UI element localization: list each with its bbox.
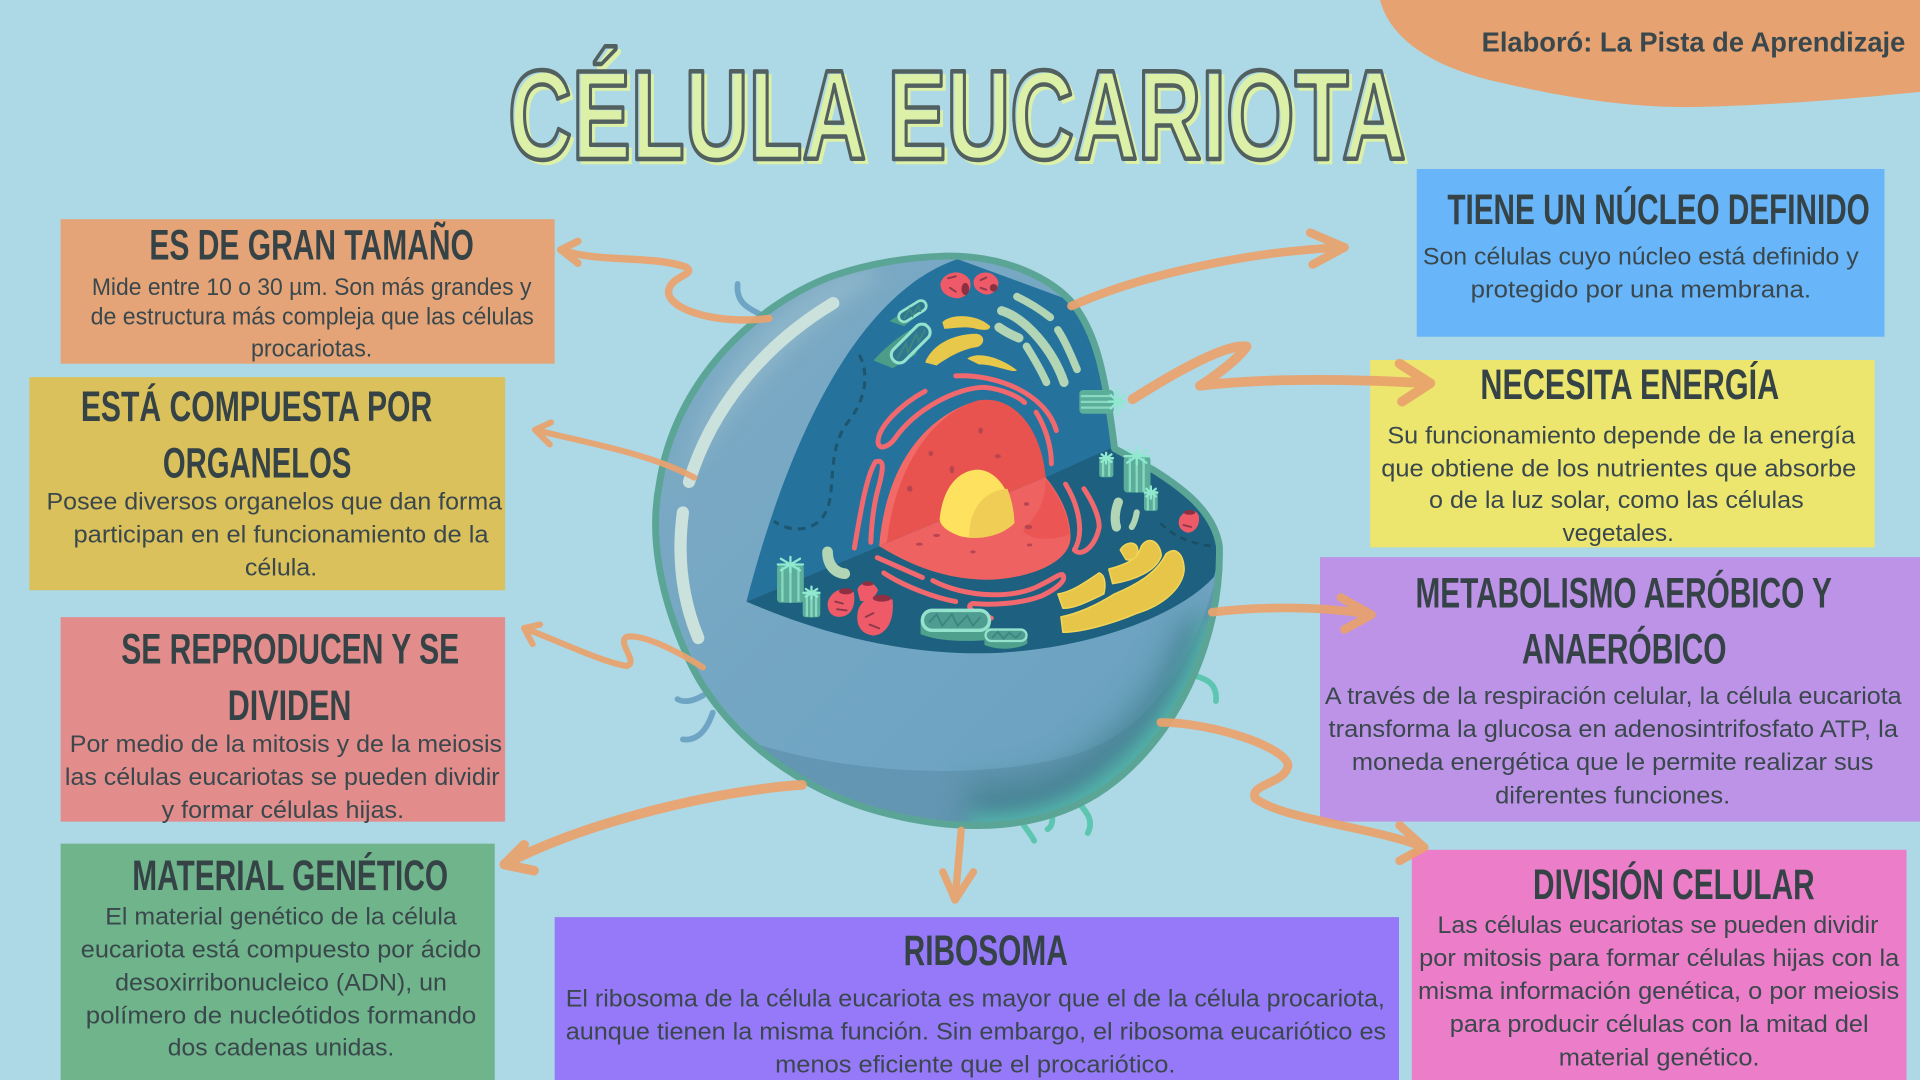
panel: está compuesta por organelos: ORGANELOS bbox=[163, 440, 351, 488]
panel: división celular: por mitosis para formar células hijas con la bbox=[1419, 945, 1900, 972]
panel: metabolismo aeróbico y anaeróbico: diferentes funciones. bbox=[1495, 782, 1730, 809]
panel: necesita energía: NECESITA ENERGÍA bbox=[1480, 361, 1779, 409]
panel: metabolismo aeróbico y anaeróbico bbox=[1320, 557, 1920, 822]
panel: división celular: Las células eucariotas se pueden dividir bbox=[1438, 912, 1878, 939]
panel: se reproducen y se dividen: y formar células hijas. bbox=[162, 797, 404, 824]
panel: ribosoma: aunque tienen la misma función. Sin embargo, el ribosoma eucariótico es bbox=[566, 1019, 1386, 1046]
panel: metabolismo aeróbico y anaeróbico: ANAERÓBICO bbox=[1522, 625, 1727, 674]
panel: necesita energía: o de la luz solar, como las células bbox=[1429, 487, 1804, 514]
panel: se reproducen y se dividen: SE REPRODUCEN Y SE bbox=[121, 626, 459, 674]
panel: necesita energía: Su funcionamiento depende de la energía bbox=[1387, 422, 1855, 449]
panel: es de gran tamaño bbox=[61, 219, 555, 364]
panel: división celular: para producir células con la mitad del bbox=[1450, 1011, 1869, 1038]
panel: material genético: MATERIAL GENÉTICO bbox=[132, 852, 448, 900]
panel: está compuesta por organelos: ESTÁ COMPUESTA POR bbox=[81, 383, 432, 431]
panel: se reproducen y se dividen: DIVIDEN bbox=[228, 682, 351, 730]
panel: ribosoma: El ribosoma de la célula eucariota es mayor que el de la célula procariota, bbox=[566, 986, 1385, 1013]
corner blob with author credit bbox=[1380, 0, 1920, 107]
panel: material genético bbox=[61, 844, 495, 1080]
arrow: to material genético bbox=[504, 785, 802, 871]
panel: material genético: dos cadenas unidas. bbox=[168, 1035, 394, 1062]
title bbox=[508, 44, 1409, 190]
panel: es de gran tamaño: Mide entre 10 o 30 µm. Son más grandes y bbox=[92, 274, 532, 301]
panel: es de gran tamaño: de estructura más compleja que las células bbox=[91, 303, 534, 330]
panel: división celular bbox=[1412, 850, 1907, 1080]
panel: material genético: desoxirribonucleico (ADN), un bbox=[115, 970, 447, 997]
panel: material genético: El material genético de la célula bbox=[105, 903, 457, 930]
panel: tiene un núcleo definido bbox=[1417, 169, 1884, 337]
arrow: to metabolismo bbox=[1212, 598, 1371, 629]
panel: metabolismo aeróbico y anaeróbico: transforma la glucosa en adenosintrifosfato ATP, la bbox=[1329, 716, 1898, 743]
arrow: to tiene un núcleo definido bbox=[1071, 233, 1344, 306]
panel: está compuesta por organelos: Posee diversos organelos que dan forma bbox=[47, 488, 502, 515]
panel: material genético: polímero de nucleótidos formando bbox=[86, 1003, 476, 1030]
panel: está compuesta por organelos: participan en el funcionamiento de la bbox=[73, 521, 489, 548]
panel: ribosoma bbox=[555, 917, 1399, 1080]
arrow: to es de gran tamaño bbox=[561, 241, 769, 320]
panel: ribosoma: RIBOSOMA bbox=[904, 927, 1068, 975]
panel: ribosoma: menos eficiente que el procariótico. bbox=[775, 1052, 1176, 1079]
panel: necesita energía: vegetales. bbox=[1562, 520, 1674, 547]
panel: es de gran tamaño: procariotas. bbox=[251, 335, 372, 362]
panel: se reproducen y se dividen bbox=[61, 617, 505, 824]
panel: metabolismo aeróbico y anaeróbico: moneda energética que le permite realizar sus bbox=[1352, 749, 1873, 776]
arrow: to ribosoma bbox=[943, 830, 973, 900]
arrow: to se reproducen bbox=[524, 624, 703, 667]
panel: división celular: material genético. bbox=[1559, 1044, 1760, 1071]
arrow: to división celular bbox=[1161, 722, 1424, 861]
panel: es de gran tamaño: ES DE GRAN TAMAÑO bbox=[149, 222, 474, 270]
panel: tiene un núcleo definido: Son células cuyo núcleo está definido y bbox=[1423, 243, 1860, 270]
panel: se reproducen y se dividen: Por medio de la mitosis y de la meiosis bbox=[70, 731, 502, 758]
corner blob with author credit: Elaboró: La Pista de Aprendizaje bbox=[1482, 26, 1905, 57]
cell illustration bbox=[656, 256, 1252, 852]
panel: necesita energía bbox=[1370, 360, 1875, 547]
panel: tiene un núcleo definido: protegido por una membrana. bbox=[1471, 277, 1811, 304]
arrow: to está compuesta por organelos bbox=[535, 422, 694, 478]
panel: división celular: misma información genética, o por meiosis bbox=[1418, 978, 1899, 1005]
title: CÉLULA EUCARIOTA bbox=[508, 44, 1406, 186]
arrow: to necesita energía bbox=[1133, 346, 1430, 402]
panel: metabolismo aeróbico y anaeróbico: A través de la respiración celular, la célula eucariota bbox=[1325, 683, 1902, 710]
title: CÉLULA EUCARIOTA bbox=[512, 48, 1409, 190]
panel: se reproducen y se dividen: las células eucariotas se pueden dividir bbox=[65, 764, 500, 791]
panel: está compuesta por organelos: célula. bbox=[245, 555, 317, 582]
panel: material genético: eucariota está compuesto por ácido bbox=[81, 937, 481, 964]
panel: está compuesta por organelos bbox=[29, 377, 505, 590]
panel: necesita energía: que obtiene de los nutrientes que absorbe bbox=[1381, 455, 1856, 482]
